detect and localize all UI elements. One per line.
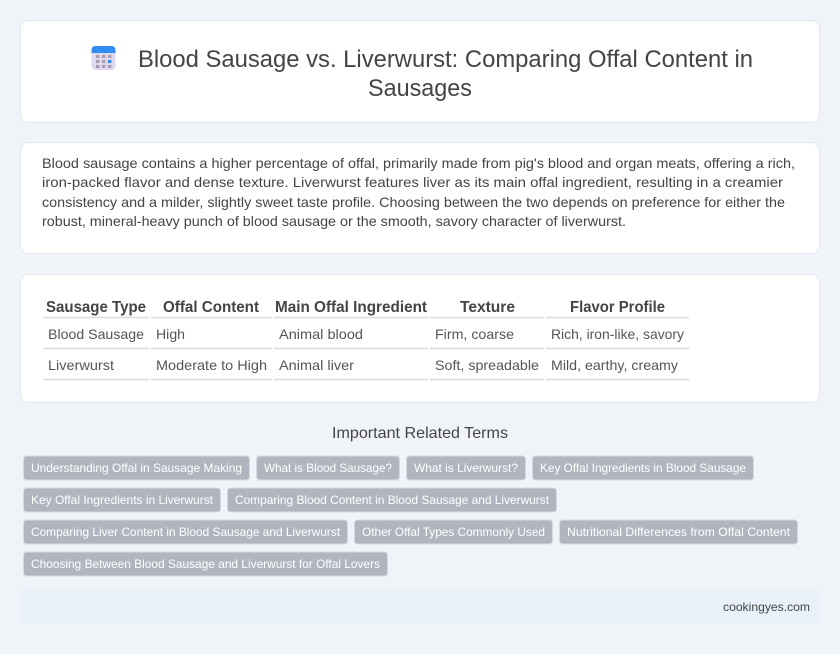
table row: Blood Sausage: High — [156, 326, 185, 342]
tag: Other Offal Types Commonly Used — [362, 525, 545, 539]
tag — [560, 520, 798, 544]
table row: Blood Sausage — [43, 326, 689, 348]
table row: Liverwurst: Moderate to High — [156, 357, 267, 373]
table row: Liverwurst: Mild, earthy, creamy — [551, 357, 678, 373]
tag: Understanding Offal in Sausage Making — [31, 461, 242, 475]
panel: header — [20, 20, 820, 122]
tag: Choosing Between Blood Sausage and Liverwurst for Offal Lovers — [31, 557, 380, 571]
tag: What is Blood Sausage? — [264, 461, 392, 475]
footer — [20, 590, 820, 624]
tag — [24, 456, 250, 480]
tag — [228, 488, 556, 512]
table header: Offal Content — [163, 299, 260, 316]
text block: description: Blood sausage contains a higher percentage of offal, primarily made from pig's blood and organ meats, offering a rich, — [42, 155, 795, 171]
title: Blood Sausage vs. Liverwurst: Comparing Offal Content in — [138, 46, 753, 73]
text block: description: consistency and a milder, slightly sweet taste profile. Choosing between the two depends on preference for either the — [42, 194, 785, 210]
icon: calendar — [92, 46, 116, 70]
heading: related terms: Important Related Terms — [332, 425, 508, 442]
tag: Comparing Liver Content in Blood Sausage and Liverwurst — [31, 525, 341, 539]
table row: Liverwurst — [43, 357, 689, 380]
table header: Flavor Profile — [570, 299, 665, 316]
table row: Blood Sausage: Animal blood — [279, 326, 363, 342]
table header: Sausage Type — [46, 299, 146, 316]
table row: Blood Sausage: Firm, coarse — [435, 326, 514, 342]
tag: Key Offal Ingredients in Liverwurst — [31, 493, 214, 507]
text block: description: iron-packed flavor and dense texture. Liverwurst features liver as its main offal ingredient, resulting in a creamier — [42, 174, 783, 190]
panel: description — [20, 142, 820, 254]
table row: Liverwurst: Soft, spreadable — [435, 357, 539, 373]
text block: description — [42, 155, 795, 229]
tag — [354, 520, 552, 544]
text block: description: robust, mineral-heavy punch of blood sausage or the smooth, savory character of liverwurst. — [42, 213, 626, 229]
panel: comparison table — [20, 274, 820, 402]
table row: Blood Sausage: Blood Sausage — [48, 326, 144, 342]
table header: Texture — [460, 299, 515, 316]
tag: What is Liverwurst? — [414, 461, 518, 475]
tag — [532, 456, 754, 480]
tag: Key Offal Ingredients in Blood Sausage — [540, 461, 746, 475]
table row: Liverwurst: Animal liver — [279, 357, 354, 373]
tag — [24, 552, 388, 576]
tags: related terms — [24, 456, 798, 576]
table header — [43, 299, 689, 318]
tag: Comparing Blood Content in Blood Sausage and Liverwurst — [235, 493, 550, 507]
footer: cookingyes.com — [723, 600, 810, 614]
table row: Liverwurst: Liverwurst — [48, 357, 114, 373]
tag — [256, 456, 400, 480]
tag — [406, 456, 526, 480]
tag — [24, 520, 348, 544]
title: Sausages — [368, 75, 472, 102]
tag: Nutritional Differences from Offal Content — [567, 525, 791, 539]
title — [138, 46, 753, 102]
table row: Blood Sausage: Rich, iron-like, savory — [551, 326, 684, 342]
tag — [24, 488, 220, 512]
table header: Main Offal Ingredient — [275, 299, 428, 316]
